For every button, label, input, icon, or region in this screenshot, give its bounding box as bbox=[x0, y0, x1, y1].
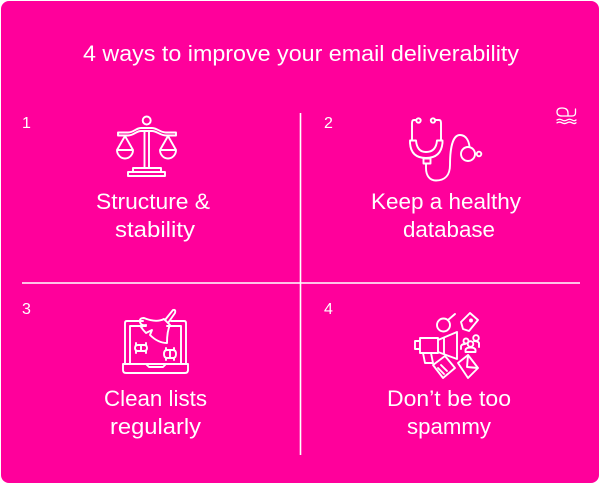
number 2: 2 bbox=[324, 115, 333, 132]
heading: keep a healthy database: Keep a healthy bbox=[371, 189, 521, 214]
heading: keep a healthy database: database bbox=[403, 217, 495, 242]
panel 2: keep a healthy database bbox=[324, 115, 521, 242]
number 1: 1 bbox=[22, 115, 31, 132]
icon: balance scales bbox=[117, 116, 176, 176]
heading: clean lists regularly: regularly bbox=[110, 414, 201, 439]
heading: don't be too spammy: Don’t be too bbox=[387, 386, 511, 411]
panel 1: structure and stability bbox=[22, 115, 210, 242]
icon: stethoscope bbox=[410, 118, 481, 180]
panel 3: clean lists regularly bbox=[22, 301, 207, 439]
icon: laptop and broom bbox=[123, 310, 188, 373]
number 4: 4 bbox=[324, 301, 333, 318]
panel 4: don't be too spammy bbox=[324, 301, 511, 439]
title: 4 ways to improve your email deliverability bbox=[83, 41, 519, 66]
heading: don't be too spammy: spammy bbox=[407, 414, 491, 439]
heading: structure and stability: Structure & bbox=[96, 189, 210, 214]
icon: megaphone with marketing symbols bbox=[415, 313, 479, 378]
heading: structure and stability: stability bbox=[115, 217, 195, 242]
number 3: 3 bbox=[22, 301, 31, 318]
heading: clean lists regularly: Clean lists bbox=[104, 386, 207, 411]
logo mark bbox=[557, 108, 576, 124]
